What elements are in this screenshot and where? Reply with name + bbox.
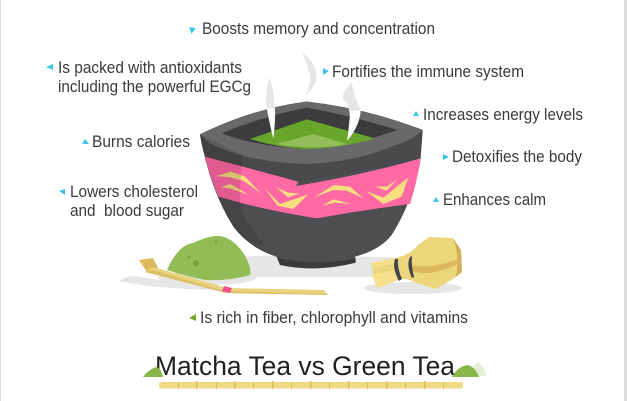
band patterns <box>217 172 408 209</box>
icon: matcha bowl <box>200 52 423 268</box>
benefit: detox: Detoxifies the body <box>452 148 583 166</box>
icon: bamboo divider <box>159 381 463 389</box>
benefit: calm: Enhances calm <box>443 191 546 209</box>
icon: right powder pile <box>452 362 486 377</box>
benefit: cholesterol: and blood sugar <box>70 202 185 220</box>
bowl opening <box>222 108 397 149</box>
benefit: cholesterol <box>59 183 198 220</box>
benefit: cholesterol: Lowers cholesterol <box>70 183 198 201</box>
icon: bamboo whisk <box>371 237 462 289</box>
benefit: antioxidants: Is packed with antioxidants <box>58 59 242 77</box>
benefit: memory: Boosts memory and concentration <box>202 20 435 38</box>
benefit: antioxidants: including the powerful EGCg <box>58 78 251 96</box>
benefit: antioxidants <box>46 59 251 96</box>
benefit: immune system: Fortifies the immune system <box>332 63 524 81</box>
tea <box>250 119 375 149</box>
rim <box>200 102 423 182</box>
bowl left shading <box>200 134 265 245</box>
icon: matcha powder pile <box>167 236 250 280</box>
pink band <box>205 157 421 218</box>
icon: bamboo scoop <box>139 258 328 295</box>
title: Matcha Tea vs Green Tea <box>155 351 456 381</box>
benefit: energy: Increases energy levels <box>423 106 583 124</box>
steam <box>266 52 361 141</box>
icon: left powder pile <box>143 367 163 377</box>
ground shadows <box>118 255 462 294</box>
benefit: calories: Burns calories <box>92 133 190 151</box>
bowl body <box>200 102 423 268</box>
benefit: fiber: Is rich in fiber, chlorophyll and vitamins <box>200 309 468 327</box>
